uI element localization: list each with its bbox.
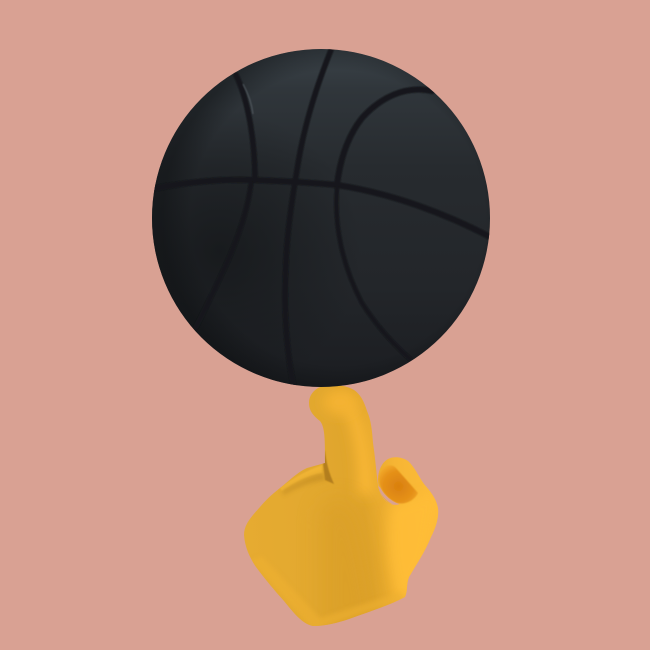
finger light <box>346 408 378 496</box>
lower right seam <box>336 188 410 359</box>
ball body <box>152 49 490 387</box>
knuckle fold shadow <box>282 473 326 495</box>
hand shading <box>250 389 440 640</box>
lower edge shade <box>254 564 398 626</box>
seam highlight <box>243 84 253 114</box>
gap between finger and thumb <box>378 486 399 505</box>
lower left seam <box>202 183 254 308</box>
icon: black basketball <box>152 49 492 388</box>
right palm light <box>388 494 438 596</box>
ball shading <box>152 49 490 387</box>
hand silhouette <box>244 385 438 626</box>
upper left seam <box>236 75 255 180</box>
ball seams <box>152 50 492 388</box>
palm shadow <box>326 611 371 625</box>
illustration: basketball balanced on finger <box>152 49 490 626</box>
equator seam <box>152 180 492 238</box>
fingertip highlight <box>324 388 353 414</box>
finger crease <box>323 450 334 484</box>
center seam <box>285 50 331 388</box>
upper right seam <box>337 90 432 185</box>
knuckle fold light <box>280 465 322 491</box>
thumb inner hollow <box>379 465 418 504</box>
icon: yellow hand with raised index finger <box>244 385 440 640</box>
